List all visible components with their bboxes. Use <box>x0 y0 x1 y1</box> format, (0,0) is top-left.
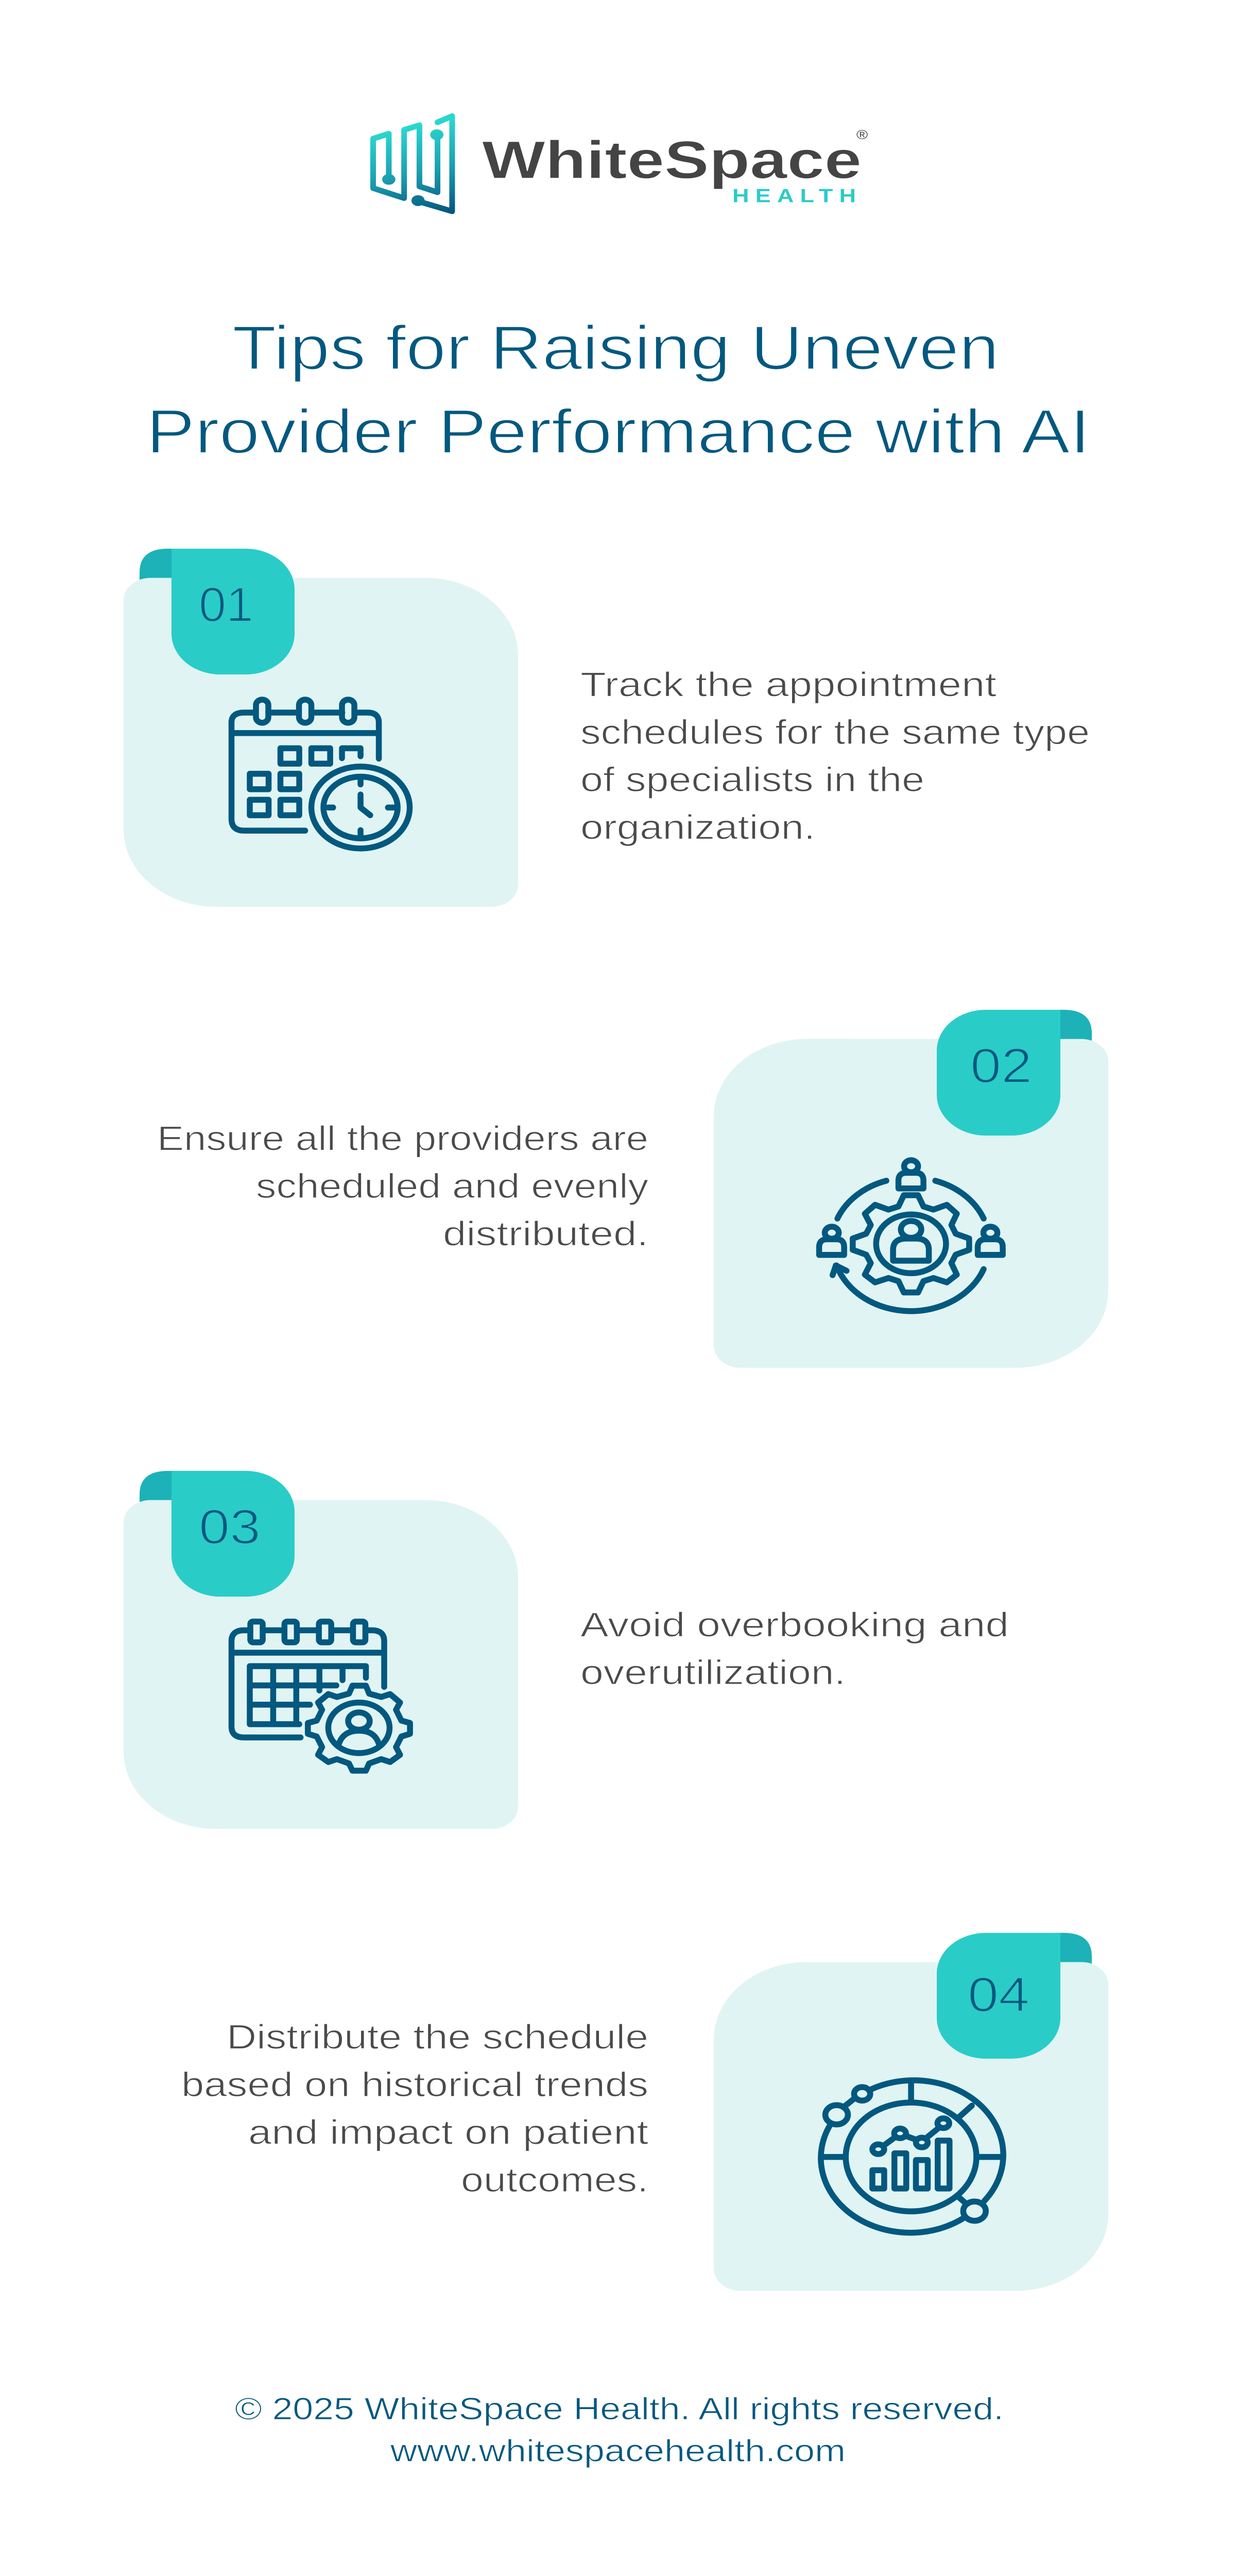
text: step 3: Avoid overbooking and <box>580 1605 1009 1644</box>
number tab <box>171 1471 295 1597</box>
number tab <box>171 549 295 674</box>
card background <box>124 1500 518 1829</box>
title: Tips for Raising Uneven <box>232 313 999 383</box>
panel: step 1 <box>124 549 518 907</box>
registered mark: ® <box>856 127 868 142</box>
footer <box>235 2392 1004 2468</box>
text: step 2: distributed. <box>443 1214 648 1253</box>
tab fold <box>140 1471 175 1511</box>
card background <box>714 1039 1108 1368</box>
title <box>146 313 1090 466</box>
logo subtitle: HEALTH <box>732 185 856 207</box>
text: step 3: overutilization. <box>580 1653 846 1692</box>
text: step 4: based on historical trends <box>181 2065 648 2104</box>
logo: WhiteSpace Health <box>373 116 868 211</box>
logo mark <box>373 116 452 211</box>
footer: © 2025 WhiteSpace Health. All rights reserved. <box>235 2392 1004 2426</box>
text: step 1: schedules for the same type <box>580 713 1090 752</box>
logo wordmark: WhiteSpace <box>482 130 862 190</box>
panel: step 4 <box>714 1933 1108 2291</box>
tab fold <box>1056 1010 1092 1049</box>
card background <box>124 578 518 907</box>
text: step 4: outcomes. <box>461 2161 648 2199</box>
number 02: 02 <box>970 1039 1032 1093</box>
text: step 4: and impact on patient <box>248 2113 648 2151</box>
icon: analytics dial <box>821 2080 1003 2233</box>
title: Provider Performance with AI <box>146 397 1090 466</box>
tab fold <box>1056 1933 1092 1972</box>
text: step 1 <box>580 665 1090 846</box>
text: step 3 <box>580 1605 1009 1692</box>
text: step 1: Track the appointment <box>580 665 997 704</box>
number 01: 01 <box>199 578 253 632</box>
text: step 2 <box>157 1119 648 1253</box>
icon: calendar with clock <box>232 700 410 849</box>
text: step 2: scheduled and evenly <box>256 1166 648 1205</box>
number tab <box>937 1010 1060 1136</box>
panel: step 2 <box>714 1010 1108 1368</box>
tab fold <box>140 549 175 588</box>
footer: www.whitespacehealth.com <box>390 2434 846 2468</box>
card background <box>714 1962 1108 2291</box>
text: step 2: Ensure all the providers are <box>157 1119 648 1158</box>
icon: people around gear <box>819 1160 1003 1311</box>
text: step 4 <box>181 2018 648 2199</box>
text: step 1: organization. <box>580 808 815 846</box>
number 03: 03 <box>199 1500 261 1554</box>
text: step 4: Distribute the schedule <box>227 2018 648 2056</box>
number tab <box>937 1933 1060 2059</box>
icon: calendar with gear and person <box>232 1622 410 1771</box>
number 04: 04 <box>968 1968 1029 2022</box>
panel: step 3 <box>124 1471 518 1829</box>
text: step 1: of specialists in the <box>580 760 924 799</box>
